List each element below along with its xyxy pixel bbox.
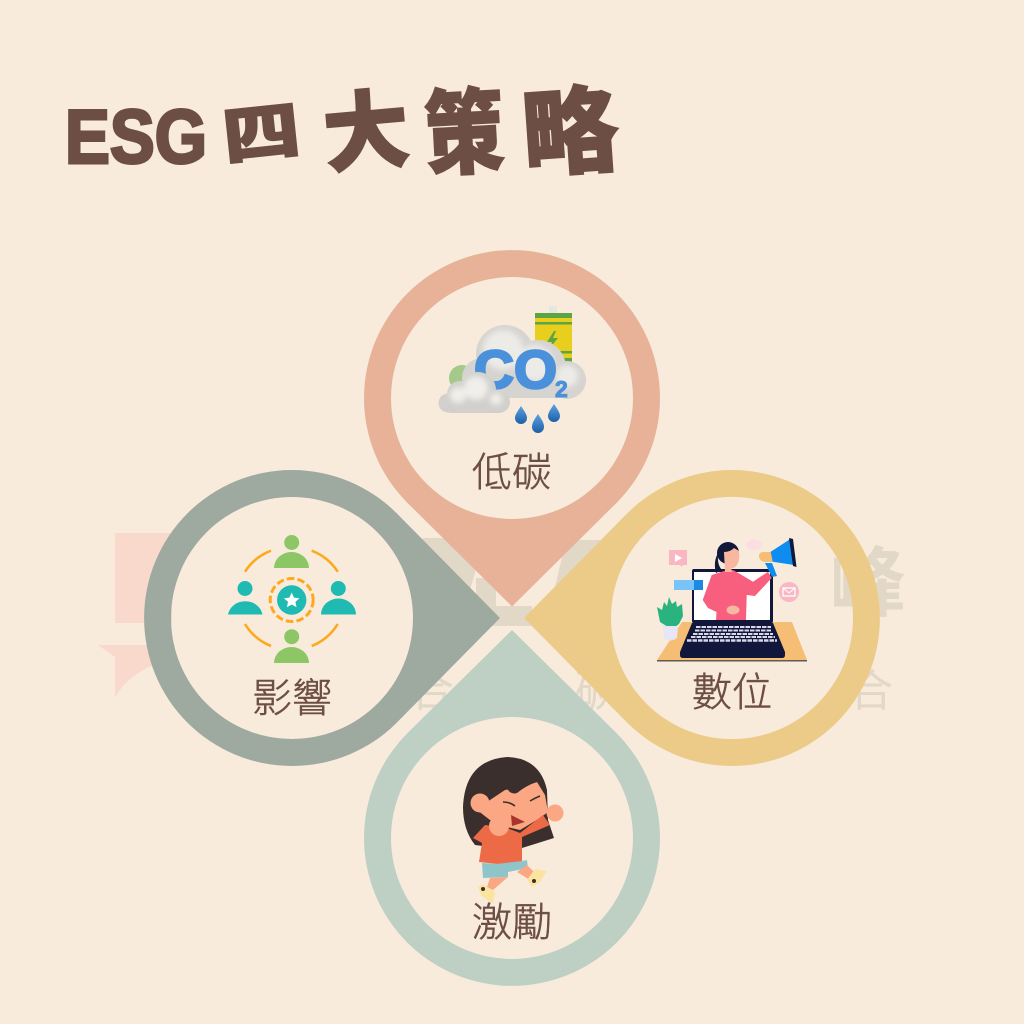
drop shape: bottom	[364, 630, 660, 986]
panel: 低碳 drop	[364, 250, 660, 606]
title: 四	[219, 95, 304, 174]
title: 略	[518, 77, 622, 190]
label: 低碳: 低碳	[472, 451, 552, 495]
drop shape: right	[524, 470, 880, 766]
icon: people network	[228, 535, 356, 663]
drop shape: top	[364, 250, 660, 606]
faint background watermark	[98, 533, 906, 716]
panel: 影響 drop	[144, 470, 500, 766]
icon: CO2 cloud with battery: CO	[474, 340, 557, 400]
faint background watermark: 峰	[830, 542, 906, 627]
panel: 數位 drop	[524, 470, 880, 766]
label: 數位: 數位	[692, 671, 772, 715]
faint background watermark: 合	[410, 667, 454, 716]
title: ESG	[65, 95, 207, 180]
icon: laptop presenter	[657, 538, 807, 662]
title: 策	[422, 82, 507, 188]
title: 大	[319, 82, 413, 185]
faint background watermark: 合	[849, 667, 893, 716]
label: 影響: 影響	[252, 677, 332, 721]
icon: CO2 cloud with battery	[438, 306, 586, 433]
faint background watermark: 碳	[575, 667, 619, 716]
label: 激勵: 激勵	[472, 901, 552, 945]
title	[65, 77, 622, 190]
panel: 激勵 drop	[364, 630, 660, 986]
drop shape: left	[144, 470, 500, 766]
icon: CO2 cloud with battery: 2	[555, 376, 568, 402]
icon: laughing girl	[463, 757, 564, 903]
